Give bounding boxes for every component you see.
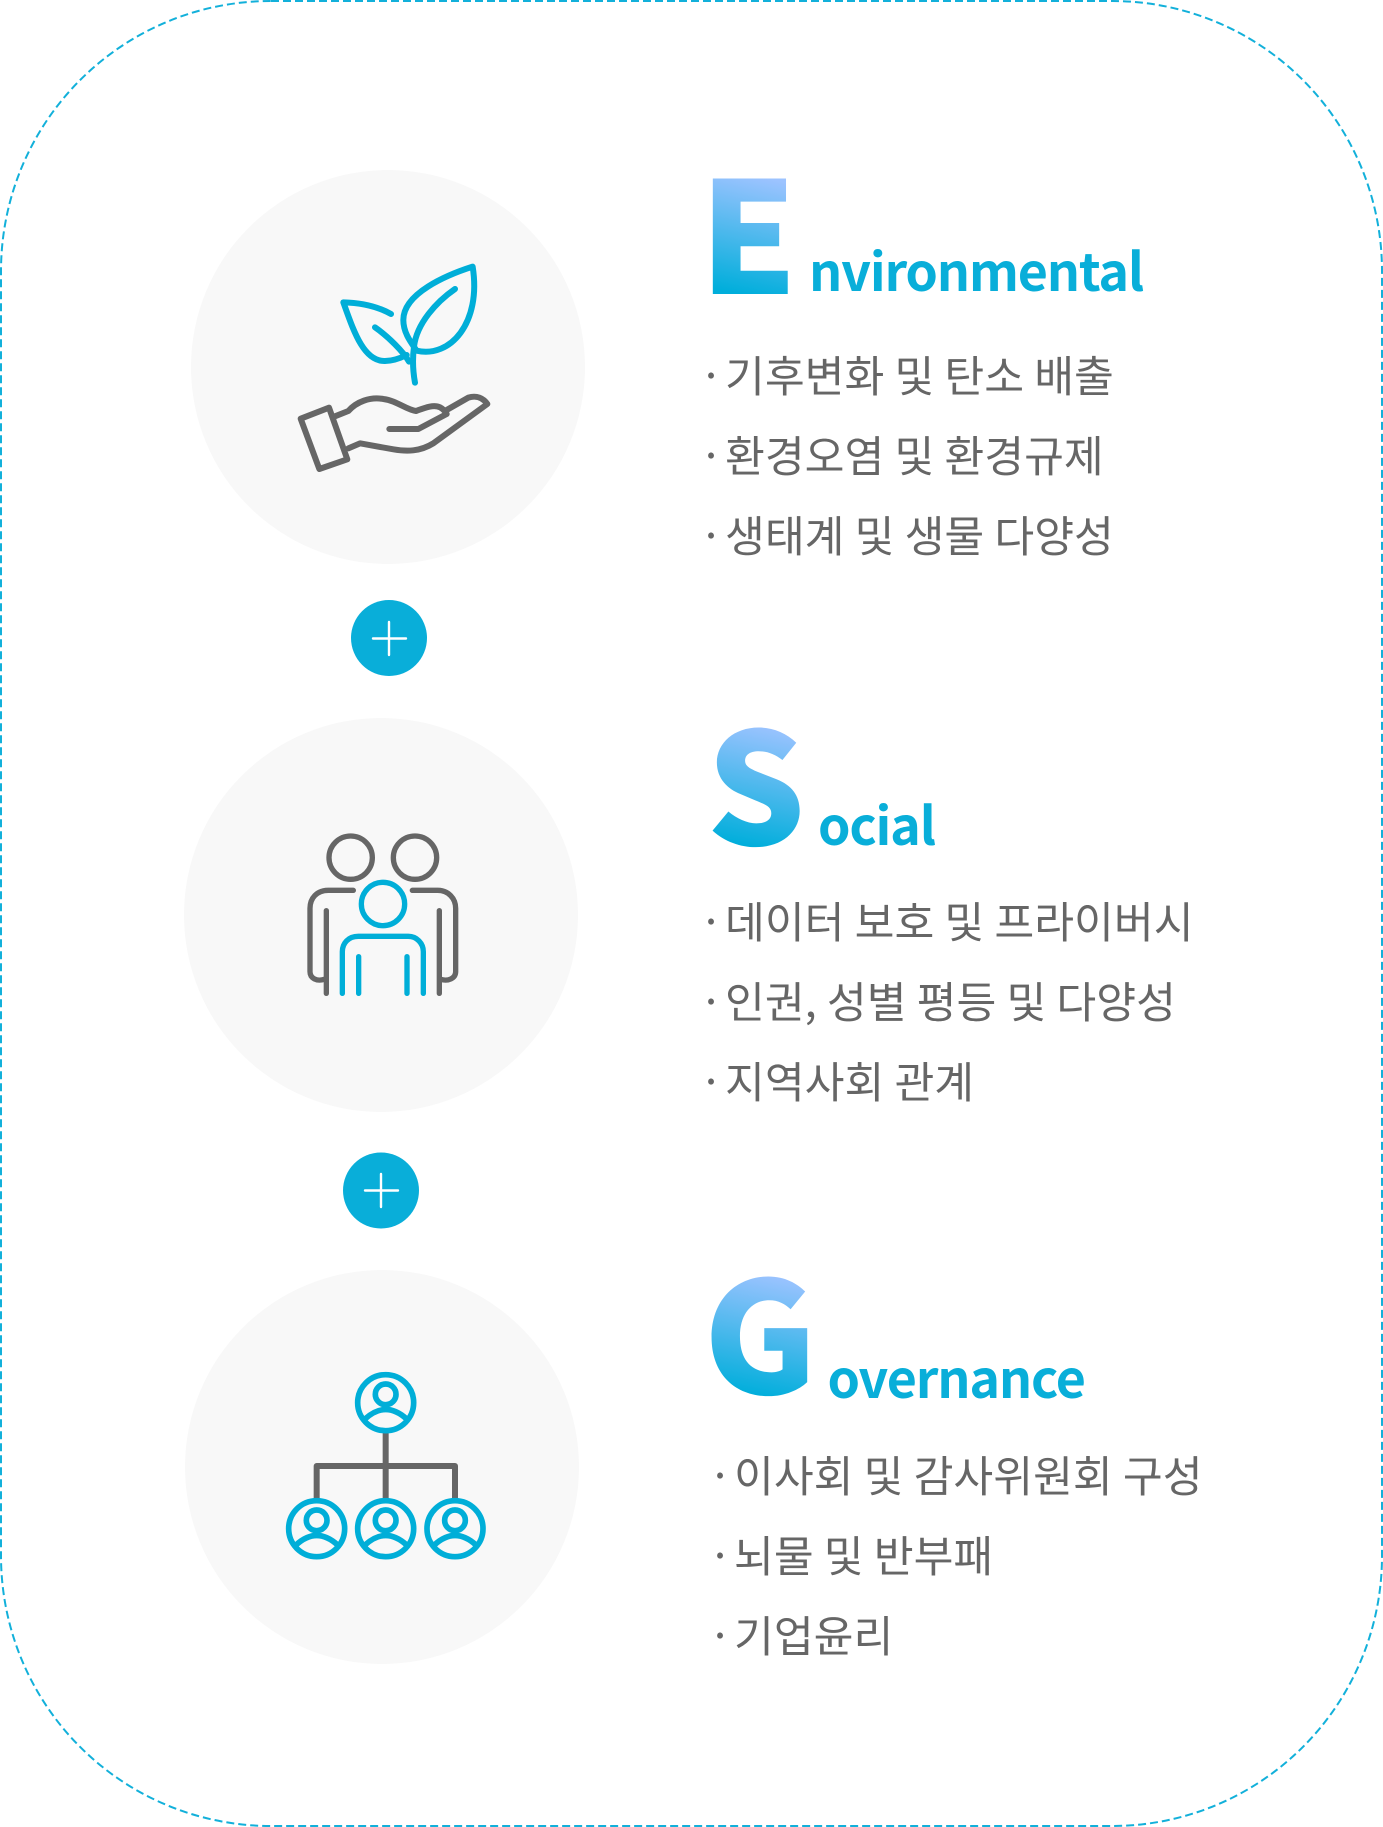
heading: Environmental	[700, 114, 1144, 339]
plus badge 2	[343, 1152, 419, 1228]
text block: governance items: 뇌물 및 반부패	[734, 1523, 993, 1585]
icon: organisation chart	[289, 1375, 483, 1557]
heading: Social	[706, 665, 936, 890]
panel: governance icon circle	[185, 1270, 579, 1664]
text block: governance items: ·	[714, 1603, 726, 1665]
text block: environmental items: 환경오염 및 환경규제	[725, 423, 1104, 485]
heading: Environmental: E	[700, 114, 797, 339]
panel: social icon circle	[184, 718, 578, 1112]
text block: governance items	[714, 1443, 1203, 1665]
text block: governance items: ·	[714, 1523, 726, 1585]
icon: hand holding sprout	[301, 267, 487, 469]
plus badge 1	[351, 600, 427, 676]
text block: environmental items: 기후변화 및 탄소 배출	[725, 343, 1114, 405]
text block: environmental items: ·	[705, 343, 717, 405]
heading: Governance	[704, 1214, 1085, 1439]
heading: Social: S	[706, 665, 806, 890]
text block: social items: ·	[705, 889, 717, 951]
text block: social items: ·	[705, 1049, 717, 1111]
text block: governance items: 이사회 및 감사위원회 구성	[734, 1443, 1203, 1505]
heading: Governance: overnance	[828, 1338, 1085, 1413]
text block: environmental items	[705, 343, 1114, 565]
text block: social items: 지역사회 관계	[725, 1049, 974, 1111]
panel: environmental icon circle	[191, 170, 585, 564]
heading: Governance: G	[704, 1214, 817, 1439]
text block: environmental items: ·	[705, 423, 717, 485]
text block: social items: 인권, 성별 평등 및 다양성	[725, 969, 1176, 1031]
text block: governance items: 기업윤리	[734, 1603, 893, 1665]
text block: governance items: ·	[714, 1443, 726, 1505]
text block: environmental items: 생태계 및 생물 다양성	[725, 503, 1114, 565]
heading: Environmental: nvironmental	[809, 231, 1144, 306]
icon: three people	[310, 836, 456, 993]
text block: social items: ·	[705, 969, 717, 1031]
text block: social items: 데이터 보호 및 프라이버시	[725, 889, 1194, 951]
text block: social items	[705, 889, 1194, 1111]
heading: Social: ocial	[818, 785, 936, 860]
text block: environmental items: ·	[705, 503, 717, 565]
